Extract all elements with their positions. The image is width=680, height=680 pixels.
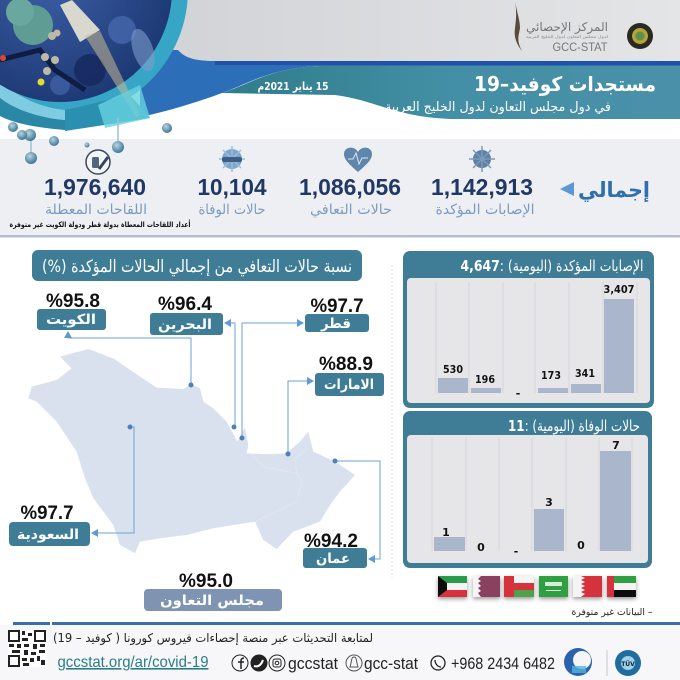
bar chart: daily cases: 341 <box>575 367 595 380</box>
connector: Saudi Arabia <box>91 424 134 537</box>
map heading: نسبة حالات التعافي من إجمالي الحالات المؤكدة (%) <box>42 257 352 277</box>
bar chart: daily cases <box>436 282 637 400</box>
flag: Kuwait <box>438 576 467 597</box>
bar chart: daily deaths: - <box>514 545 518 558</box>
panel: totals band <box>0 139 680 238</box>
social icons <box>232 655 285 671</box>
vaccines footnote: أعداد اللقاحات المعطاة بدولة قطر ودولة الكويت غير متوفرة <box>10 219 190 229</box>
flag: UAE <box>607 576 636 597</box>
certification logo <box>564 648 592 676</box>
stat: confirmed cases: 1,142,913 <box>431 174 533 200</box>
label: Kuwait: %95.8 <box>46 291 100 312</box>
connector: UAE <box>286 377 314 456</box>
label: Saudi Arabia: السعودية <box>17 527 79 543</box>
bar chart: daily cases: 196 <box>475 373 495 386</box>
molecule balls <box>8 118 172 164</box>
label: Kuwait <box>37 291 106 330</box>
bar chart: daily deaths: 0 <box>477 541 485 554</box>
bar chart: daily cases: 173 <box>541 369 561 382</box>
stat: vaccines: اللقاحات المعطلة <box>45 202 147 218</box>
flag: Qatar <box>473 576 500 597</box>
label: GCC: %95.0 <box>179 571 233 592</box>
label: Oman: عمان <box>316 551 350 567</box>
label: Kuwait: الكويت <box>46 312 96 328</box>
flag: Bahrain <box>573 576 602 597</box>
flag: Oman <box>504 576 534 597</box>
bar chart: daily deaths: 0 <box>577 539 585 552</box>
stat: recoveries: 1,086,056 <box>299 174 401 200</box>
bar chart: daily deaths <box>432 438 632 558</box>
GCC-STAT logo: المركز الإحصائي <box>526 20 608 35</box>
website link: gccstat.org/ar/covid-19 <box>58 654 209 671</box>
country flags <box>438 576 636 597</box>
stat: deaths <box>198 146 267 218</box>
title: مستجدات كوفيد–19 <box>474 72 656 96</box>
stat: recoveries <box>299 148 401 218</box>
QR code <box>8 630 46 667</box>
label: Saudi Arabia <box>9 503 90 546</box>
bar chart: daily cases: - <box>516 387 520 400</box>
bar chart: daily cases: 530 <box>443 363 463 376</box>
whatsapp icon <box>431 656 445 670</box>
stat: confirmed cases <box>431 146 534 218</box>
label: UAE <box>315 354 384 396</box>
panel heading: حالات الوفاة (اليومية) :11 <box>508 417 640 435</box>
TUV logo: TÜV <box>621 661 635 668</box>
connector: Oman <box>332 458 380 563</box>
stat: deaths: حالات الوفاة <box>198 202 266 218</box>
TUV logo <box>615 650 641 676</box>
panel heading: الإصابات المؤكدة (اليومية) :4,647 <box>460 257 644 275</box>
label: Oman <box>303 531 367 568</box>
snapchat icon <box>346 655 362 671</box>
stat: recoveries: حالات التعافي <box>310 202 392 218</box>
label: GCC: مجلس التعاون <box>160 593 264 609</box>
flag: Saudi Arabia <box>539 576 568 597</box>
label: Bahrain: %96.4 <box>158 294 212 315</box>
panel: daily confirmed cases <box>403 251 654 408</box>
label: Saudi Arabia: %97.7 <box>20 503 74 524</box>
label: GCC <box>144 571 282 611</box>
label: Qatar: %97.7 <box>310 296 364 317</box>
label: Qatar: قطر <box>320 316 351 332</box>
stat: confirmed cases: الإصابات المؤكدة <box>436 202 534 218</box>
connector: Bahrain <box>224 319 236 430</box>
date: 15 يناير 2021م <box>258 80 328 93</box>
follow text: لمتابعة التحديثات عبر منصة إحصاءات فيروس كورونا ( كوفيد – 19) <box>53 631 373 646</box>
label: Bahrain: البحرين <box>158 317 212 333</box>
data not available note: – البيانات غير متوفرة <box>572 607 653 618</box>
label: Bahrain <box>150 294 223 335</box>
label: UAE: %88.9 <box>319 354 373 375</box>
label: UAE: الامارات <box>324 377 374 393</box>
bar chart: daily deaths: 1 <box>442 526 450 539</box>
heading: total: إجمالي <box>578 178 650 202</box>
subtitle: في دول مجلس التعاون لدول الخليج العربية <box>385 100 611 115</box>
map of GCC countries <box>28 349 355 553</box>
label: Oman: %94.2 <box>304 531 358 552</box>
GCC-STAT logo: GCC-STAT <box>552 40 608 54</box>
connector: Qatar <box>240 319 304 440</box>
stat: vaccines: 1,976,640 <box>44 174 146 200</box>
label: Qatar <box>305 296 369 332</box>
bar chart: daily deaths: 3 <box>545 496 553 509</box>
GCC-STAT logo: لدول مجلس التعاون لدول الخليج العربية <box>526 34 608 39</box>
handle: gcc-stat: gcc-stat <box>364 654 418 673</box>
GCC-STAT logo <box>515 2 653 54</box>
stat: vaccines <box>44 150 147 218</box>
bar chart: daily cases: 3,407 <box>604 283 634 296</box>
handle: gccstat: gccstat <box>288 654 338 673</box>
panel: daily deaths <box>403 411 652 568</box>
header background <box>140 0 680 119</box>
footer <box>0 622 680 680</box>
connector: Kuwait <box>64 331 194 388</box>
header vaccine illustration <box>0 0 188 131</box>
stat: deaths: 10,104 <box>198 174 267 200</box>
map heading <box>32 250 362 281</box>
bar chart: daily deaths: 7 <box>612 439 620 452</box>
phone number: +968 2434 6482 <box>451 654 555 673</box>
